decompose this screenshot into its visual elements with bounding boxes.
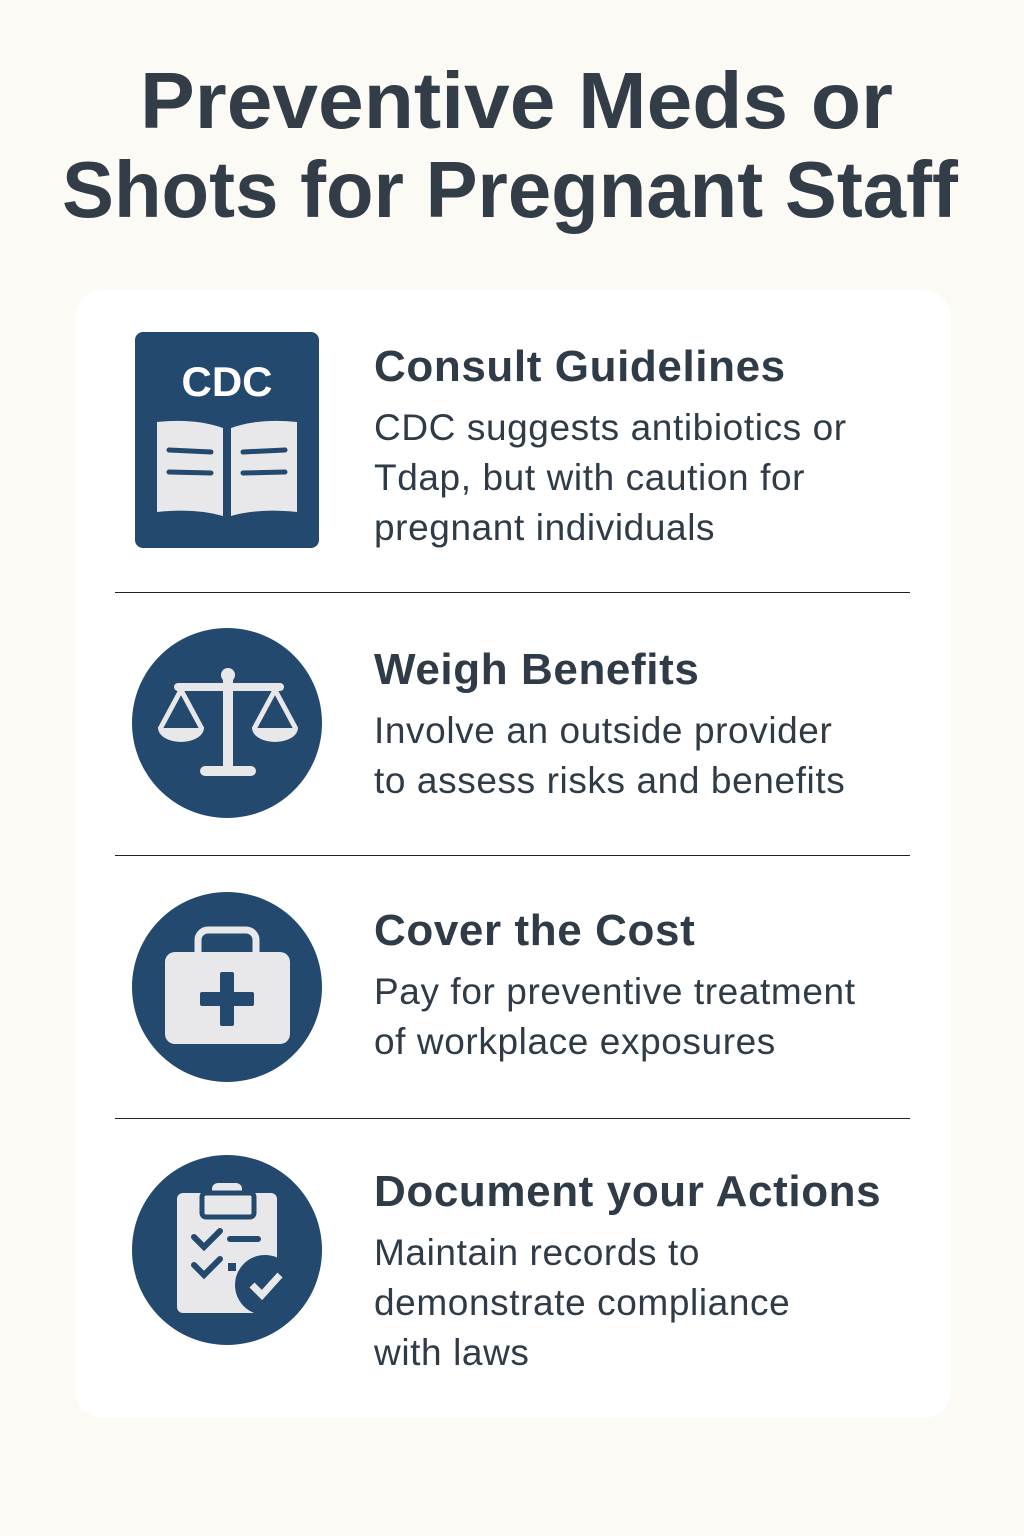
icon: CDC book: CDC [182,358,272,405]
text: document body: with laws [374,1332,530,1373]
icon: CDC book [135,332,319,548]
icon: clipboard [132,1155,322,1345]
icon: scales [132,628,322,818]
text: document body [374,1232,790,1373]
panel: card [75,290,951,1418]
text: document body: demonstrate compliance [374,1282,790,1323]
heading: Cover the Cost: Cover the Cost [374,906,695,955]
heading: Consult Guidelines: Consult Guidelines [374,342,786,391]
text: cost body: Pay for preventive treatment [374,971,856,1012]
text: consult body: pregnant individuals [374,507,715,548]
title: Shots for Pregnant Staff [62,145,958,234]
text: consult body: Tdap, but with caution for [374,457,805,498]
icon: medical kit [132,892,322,1082]
heading: Document your Actions: Document your Actions [374,1167,881,1216]
text: weigh body: Involve an outside provider [374,710,832,751]
text: cost body [374,971,856,1062]
text: cost body: of workplace exposures [374,1021,776,1062]
text: weigh body: to assess risks and benefits [374,760,845,801]
title [62,60,958,234]
text: consult body [374,407,847,548]
text: document body: Maintain records to [374,1232,700,1273]
heading: Weigh Benefits: Weigh Benefits [374,645,699,694]
text: consult body: CDC suggests antibiotics or [374,407,847,448]
text: weigh body [374,710,845,801]
